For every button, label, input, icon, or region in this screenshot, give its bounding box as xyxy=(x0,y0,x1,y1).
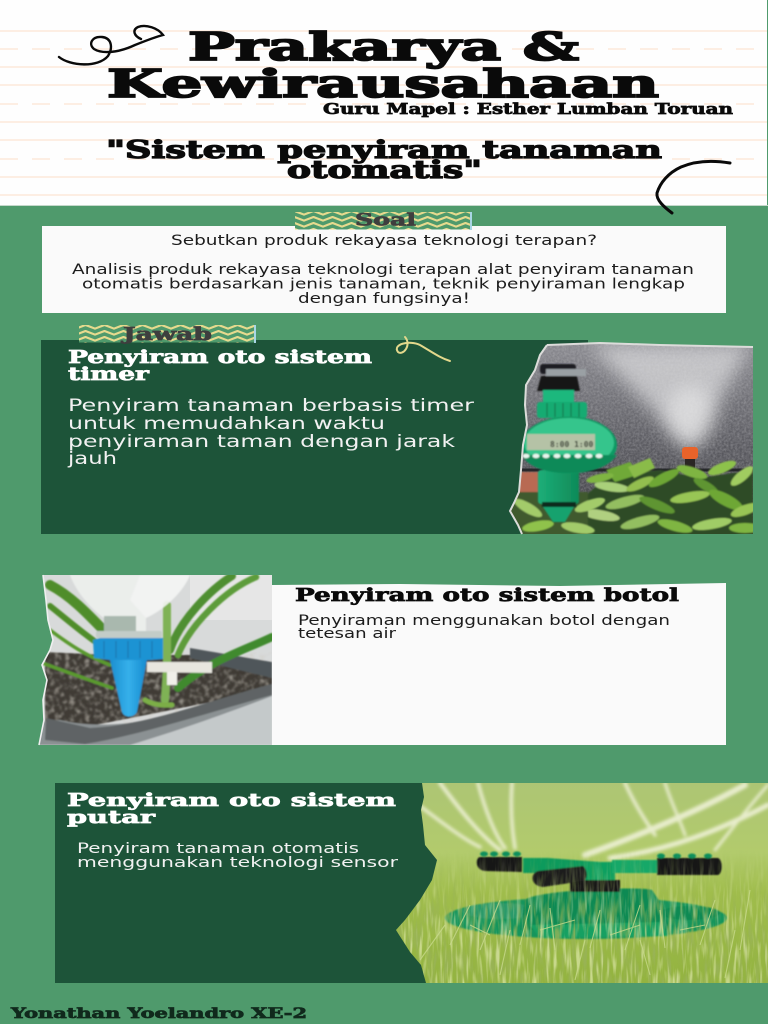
panel: soal xyxy=(42,210,726,313)
tape label: soal xyxy=(295,210,472,230)
timer device xyxy=(521,364,617,522)
header paper xyxy=(0,0,768,206)
decorative arc top right xyxy=(657,161,730,213)
description: putar: Penyiram tanaman otomatis xyxy=(77,840,359,857)
grass texture xyxy=(396,856,768,983)
torn paper edge: photo 2 xyxy=(39,575,53,745)
question text: Sebutkan produk rekayasa teknologi terapan? xyxy=(171,232,597,249)
white tube xyxy=(147,662,212,673)
description: botol: tetesan air xyxy=(298,625,396,642)
subtitle: "Sistem penyiram tanaman xyxy=(106,135,662,164)
tape label: soal: Soal xyxy=(355,210,417,230)
description: putar: menggunakan teknologi sensor xyxy=(77,854,398,871)
photo: garden timer xyxy=(505,340,761,536)
heading: timer: Penyiram oto sistem xyxy=(68,348,373,368)
description: timer xyxy=(67,396,474,469)
subtitle xyxy=(106,135,662,184)
white text card xyxy=(272,583,726,745)
description: botol xyxy=(298,612,670,642)
bottle xyxy=(70,575,190,632)
blue dripper xyxy=(93,638,163,660)
foreground grass blades xyxy=(420,890,750,980)
icon: yellow squiggle xyxy=(397,337,450,361)
photo: bottle dripper xyxy=(38,575,274,747)
description: timer: untuk memudahkan waktu xyxy=(68,414,385,434)
foliage and wall left xyxy=(505,472,607,536)
question text: otomatis berdasarkan jenis tanaman, teknik penyiraman lengkap xyxy=(82,276,685,292)
subtitle: otomatis" xyxy=(287,155,482,184)
heading: putar: Penyiram oto sistem xyxy=(67,790,396,811)
foliage right xyxy=(579,458,761,536)
photo: rotating sprinkler xyxy=(390,783,768,990)
leaves xyxy=(45,576,272,705)
panel: penyiram botol xyxy=(38,575,726,747)
tape label: jawab xyxy=(79,324,256,345)
timer device: 8:00 1:00 xyxy=(550,440,594,449)
title: Kewirausahaan xyxy=(107,61,659,106)
teacher name: Guru Mapel : Esther Lumban Toruan xyxy=(323,101,734,118)
description: putar xyxy=(77,840,398,871)
heading: putar xyxy=(67,790,396,828)
footer author: Yonathan Yoelandro XE-2 xyxy=(10,1006,307,1022)
heading: botol: Penyiram oto sistem botol xyxy=(295,586,680,606)
decorative squiggle top left xyxy=(59,26,163,64)
panel: penyiram putar xyxy=(55,783,768,990)
sprinkler xyxy=(445,852,727,939)
title: Prakarya & xyxy=(188,24,579,69)
question text xyxy=(72,232,694,307)
title xyxy=(107,24,659,106)
question text: Analisis produk rekayasa teknologi terapan alat penyiram tanaman xyxy=(72,261,694,278)
heading: putar: putar xyxy=(67,807,156,828)
description: timer: Penyiram tanaman berbasis timer xyxy=(68,396,474,416)
heading: timer xyxy=(68,348,373,385)
panel: penyiram timer xyxy=(41,324,761,536)
description: botol: Penyiraman menggunakan botol dengan xyxy=(298,612,670,629)
description: timer: penyiraman taman dengan jarak xyxy=(68,432,455,452)
question text: dengan fungsinya! xyxy=(298,290,470,307)
torn paper edge: photo 1 xyxy=(510,343,753,534)
tape label: jawab: Jawab xyxy=(120,324,212,345)
heading: timer: timer xyxy=(68,365,150,385)
water jets xyxy=(420,783,768,858)
description: timer: jauh xyxy=(67,449,117,469)
